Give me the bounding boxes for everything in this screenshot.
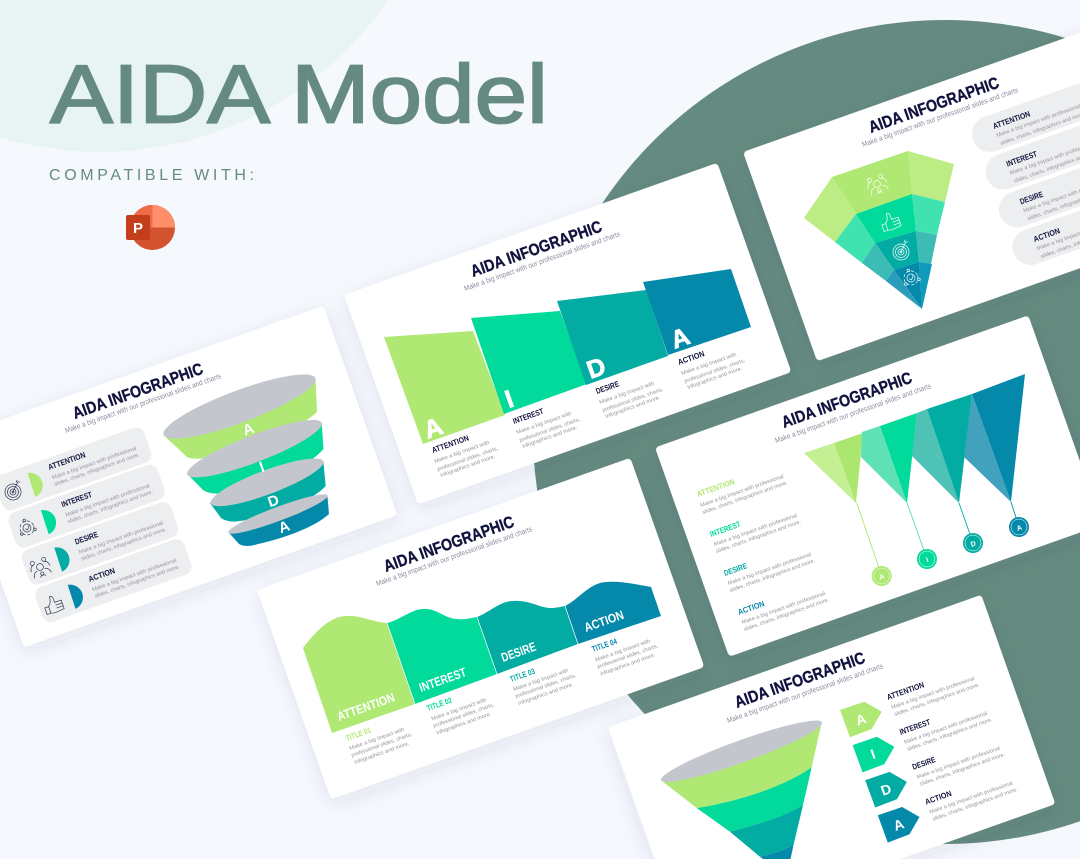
panel: layered funnel slide (0, 306, 397, 647)
text: interest: professional slides, charts, (519, 417, 581, 444)
row: action: ACTION (87, 566, 116, 584)
badge: D (865, 772, 907, 808)
chart: four inverted triangles with pins (804, 374, 1029, 586)
chart: stacked funnel bands (158, 363, 330, 546)
text: desire: DESIRE (911, 755, 937, 772)
chart: wave blocks: DESIRE (499, 640, 538, 665)
row: attention: ATTENTION (992, 109, 1032, 131)
chart: wave blocks: ATTENTION (335, 691, 397, 724)
text: attention: ATTENTION (696, 477, 736, 499)
row: interest: INTEREST (1005, 149, 1038, 169)
chart: stacked funnel bands: I (257, 459, 267, 476)
text: desire: professional slides, charts, (602, 387, 664, 414)
icon: PowerPoint logo: P (133, 220, 143, 237)
chart: four stepped blocks: A (420, 412, 447, 445)
text: interest: infographics and more. (522, 425, 578, 450)
chart: diamond segments (804, 151, 954, 309)
badge: I: I (868, 746, 877, 762)
chart: stacked funnel bands: D (266, 491, 282, 511)
row: interest: Make a big impact with professional (65, 483, 151, 518)
row: action: Make a big impact with professional (92, 558, 177, 593)
text: attention: slides, charts, infographics and more. (702, 480, 789, 516)
text: title 04: Make a big impact with (595, 638, 651, 663)
text: action: ACTION (737, 599, 766, 617)
text: title 03 (509, 667, 577, 707)
chart: cone funnel (657, 712, 826, 859)
slide subtitle: Make a big impact with our professional slides and charts (463, 229, 621, 293)
text: action: professional slides, charts, (684, 358, 746, 385)
chart: four inverted triangles with pins: D (970, 540, 977, 549)
text: action: infographics and more. (687, 366, 743, 391)
text: attention: Make a big impact with professional (700, 474, 785, 509)
slide title: AIDA INFOGRAPHIC (468, 218, 604, 281)
badge: A: A (891, 815, 906, 834)
text: desire: DESIRE (723, 561, 749, 578)
slide subtitle: Make a big impact with our professional slides and charts (375, 524, 533, 588)
text: action: Make a big impact with (681, 352, 737, 377)
text: title 04: infographics and more. (600, 652, 656, 677)
row: attention: ATTENTION (47, 450, 87, 472)
text: desire: Make a big impact with professional (916, 746, 1001, 781)
text: interest: slides, charts, infographics and more. (906, 717, 993, 753)
text: desire: DESIRE (595, 379, 621, 396)
slide subtitle: Make a big impact with our professional slides and charts (64, 371, 222, 435)
text: desire: slides, charts, infographics and more. (919, 752, 1006, 788)
slide title: AIDA INFOGRAPHIC (732, 649, 868, 712)
badge: D: D (879, 780, 893, 799)
row: action: ACTION (1032, 226, 1061, 244)
badge: I (853, 737, 894, 772)
text: title 03: infographics and more. (518, 682, 574, 707)
row: attention: Make a big impact with professional (996, 104, 1080, 139)
large green backdrop circle (533, 20, 1080, 844)
chart: wave blocks: INTEREST (417, 665, 468, 695)
text: attention: ATTENTION (886, 680, 926, 702)
chart: four inverted triangles with pins: A (1016, 524, 1023, 533)
text: title 03: Make a big impact with (513, 668, 569, 693)
text: attention (431, 433, 499, 479)
text: action: Make a big impact with professional (741, 591, 826, 626)
text: attention: Make a big impact with professional (891, 676, 976, 711)
text: interest: INTEREST (709, 520, 742, 539)
text: interest: slides, charts, infographics and more. (715, 519, 802, 555)
text: attention: professional slides, charts, (437, 446, 499, 473)
text: desire: Make a big impact with professional (727, 552, 812, 587)
text: action: ACTION (677, 349, 706, 367)
row: desire (994, 145, 1080, 232)
chart: stacked funnel bands: A (241, 420, 257, 440)
badge: A (840, 702, 882, 737)
chart: four stepped blocks (384, 269, 751, 445)
row: attention (0, 425, 154, 513)
row: interest: slides, charts, infographics and more. (67, 489, 154, 525)
text: desire: slides, charts, infographics and more. (729, 558, 816, 594)
text: title 02 (426, 696, 495, 736)
text: attention: ATTENTION (431, 433, 470, 455)
text: title 01: Make a big impact with (349, 727, 405, 752)
text: interest: Make a big impact with (516, 411, 572, 436)
text: title 02: professional slides, charts, (433, 702, 495, 729)
text: interest (512, 407, 581, 450)
slide subtitle: Make a big impact with our professional slides and charts (726, 661, 884, 725)
chart: wave blocks (303, 582, 661, 733)
text: interest: INTEREST (898, 718, 932, 737)
text: action: slides, charts, infographics and more. (743, 597, 830, 633)
panel: stepped bars slide (344, 163, 791, 504)
decorative pale circle top left (0, 0, 449, 152)
row: attention (967, 70, 1080, 157)
row: attention: Make a big impact with professional (51, 446, 137, 481)
panel: cone slide (609, 596, 1054, 859)
text: title 01 (345, 726, 413, 766)
text: action: slides, charts, infographics and more. (932, 787, 1019, 823)
chart: wave blocks: ACTION (582, 608, 626, 635)
text: interest: INTEREST (512, 407, 545, 426)
text: title 04: TITLE 04 (591, 637, 619, 654)
row: desire (19, 500, 181, 587)
panel: waves slide (257, 458, 704, 799)
chart: four inverted triangles with pins: A (878, 573, 886, 582)
row: desire: Make a big impact with professional (78, 520, 164, 556)
row: desire: DESIRE (74, 530, 100, 546)
text: action: ACTION (924, 789, 953, 807)
text: desire: Make a big impact with (599, 381, 655, 406)
slide title: AIDA INFOGRAPHIC (779, 369, 915, 432)
slide title: AIDA INFOGRAPHIC (866, 74, 1002, 137)
slide subtitle: Make a big impact with our professional slides and charts (774, 381, 932, 445)
row: action (33, 537, 194, 624)
slide title: AIDA INFOGRAPHIC (381, 513, 517, 576)
text: title 02: Make a big impact with (431, 697, 487, 722)
panel: diamond slide (743, 20, 1080, 361)
row: desire: slides, charts, infographics and more. (80, 527, 167, 562)
text: title 02: TITLE 02 (426, 696, 454, 713)
text: title 01: professional slides, charts, (351, 732, 413, 759)
text: title 02: infographics and more. (436, 711, 492, 736)
text: title 01: TITLE 01 (345, 726, 373, 743)
row: interest: INTEREST (60, 490, 93, 509)
text: title 03: professional slides, charts, (515, 673, 577, 700)
text: title 01: infographics and more. (354, 741, 410, 766)
text: title 04 (591, 637, 659, 677)
text: attention: Make a big impact with (434, 440, 490, 465)
text: desire (595, 379, 664, 420)
text: interest: Make a big impact with professional (903, 711, 988, 746)
text: action (677, 349, 746, 391)
badge: A (878, 807, 920, 843)
subheading: compatible with: COMPATIBLE WITH: (49, 167, 254, 184)
text: interest: Make a big impact with professional (713, 513, 798, 548)
text: title 04: professional slides, charts, (597, 643, 659, 670)
text: title 03: TITLE 03 (509, 667, 537, 684)
row: interest (6, 462, 167, 550)
icon: PowerPoint logo (126, 205, 175, 250)
text: attention: slides, charts, infographics and more. (894, 682, 981, 718)
row: action (1008, 183, 1080, 270)
slide subtitle: Make a big impact with our professional slides and charts (861, 85, 1019, 149)
text: attention: infographics and more. (440, 454, 496, 479)
chart: four inverted triangles with pins: I (925, 557, 930, 564)
row: desire: DESIRE (1019, 190, 1045, 206)
chart: stacked funnel bands: A (276, 517, 292, 537)
panel: triangles slide (655, 315, 1080, 657)
text: action: Make a big impact with professional (929, 781, 1014, 816)
text: desire: infographics and more. (605, 395, 661, 420)
badge: A: A (853, 710, 868, 729)
chart: four stepped blocks: D (583, 352, 610, 385)
slide title: AIDA INFOGRAPHIC (70, 360, 206, 423)
row: action: slides, charts, infographics and more. (94, 564, 181, 600)
heading: AIDA Model: AIDA Model (50, 48, 548, 140)
chart: four stepped blocks: A (667, 322, 694, 355)
chart: four stepped blocks: I (501, 385, 517, 414)
row: attention: slides, charts, infographics and more. (54, 452, 141, 488)
row: interest (980, 107, 1080, 195)
